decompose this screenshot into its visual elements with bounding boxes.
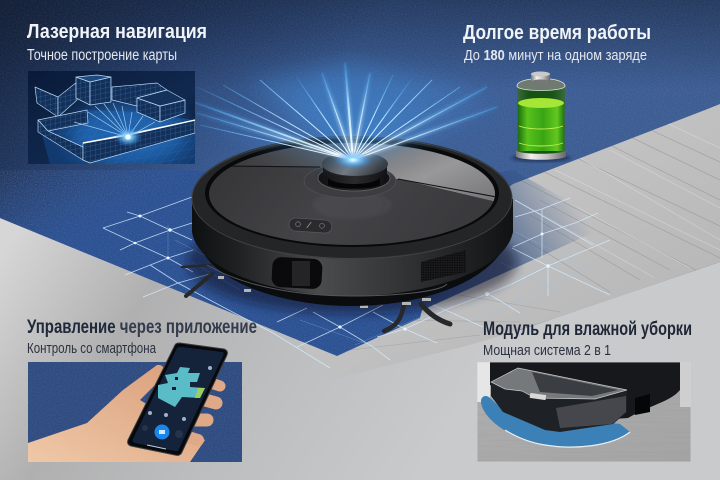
heading: long runtime: Долгое время работы (463, 22, 651, 44)
photo: mop module (477, 362, 691, 462)
panel: app control (27, 317, 257, 462)
robot feet (218, 276, 431, 308)
camera window (271, 257, 323, 289)
panel: battery life (463, 22, 651, 162)
side brushes (182, 265, 450, 331)
robot underside (490, 362, 680, 420)
panel: wet cleaning module (477, 319, 692, 462)
map wireframe illustration (28, 71, 195, 167)
laser beams (180, 62, 497, 169)
subheading: smartphone control: Контроль со смартфона (27, 340, 156, 357)
hand (28, 365, 205, 462)
grid lines (103, 197, 610, 368)
robot base (196, 232, 510, 306)
subheading: map building: Точное построение карты (27, 47, 177, 64)
wooden floor, upper right (300, 104, 720, 380)
phone (128, 343, 227, 455)
robot lid (209, 143, 495, 245)
heading: laser navigation: Лазерная навигация (27, 21, 207, 43)
app map (158, 367, 205, 407)
photo: hand holding phone (28, 343, 242, 462)
robot side wall (192, 199, 513, 296)
subheading: 180 minutes: До 180 минут на одном заряде (464, 47, 647, 64)
grid nodes (134, 214, 550, 331)
carpet under robot with floor grid (0, 170, 610, 368)
heading: app control: Управление через приложение (27, 317, 257, 338)
mop pad (481, 396, 630, 447)
lidar tower (304, 152, 396, 198)
top rim (192, 136, 512, 258)
panel: laser navigation (27, 21, 207, 167)
water tank (491, 383, 627, 432)
button panel (289, 218, 332, 234)
subheading: 2 in 1 system: Мощная система 2 в 1 (483, 342, 611, 359)
robot vacuum (182, 130, 517, 331)
gray floor, lower area (0, 218, 720, 480)
icon: battery (511, 72, 571, 162)
vent grille (421, 250, 466, 282)
